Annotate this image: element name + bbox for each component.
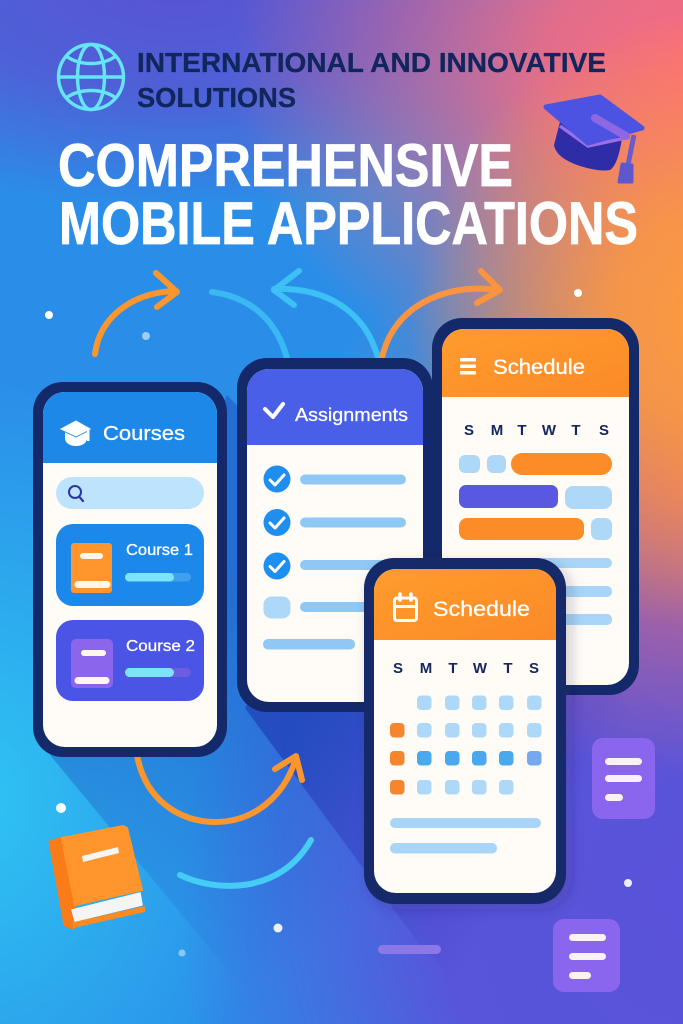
- subtitle heading: SOLUTIONS: [137, 82, 296, 113]
- text lines: [390, 818, 541, 854]
- icon: menu: [460, 358, 476, 374]
- weekday letters: M: [420, 660, 432, 677]
- weekday letters: T: [448, 660, 458, 677]
- icon: document bottom: [553, 919, 620, 992]
- arrow: bottom orange: [137, 755, 302, 822]
- main title: COMPREHENSIVE: [58, 132, 513, 199]
- icon: document top: [592, 738, 655, 819]
- calendar grid: [390, 696, 542, 794]
- phone: schedule bars: [432, 318, 639, 695]
- course card 2: [56, 620, 204, 701]
- weekday letters: [464, 422, 609, 439]
- main title: [58, 132, 638, 257]
- arrow: top orange left: [95, 273, 177, 354]
- assignments label: Assignments: [295, 404, 408, 425]
- course card 2: Course 2: [126, 638, 195, 655]
- courses label: Courses: [103, 423, 185, 445]
- weekday letters: M: [491, 422, 503, 439]
- diagonal shadow of assignments phone: [245, 400, 683, 1024]
- checklist: [263, 466, 406, 650]
- weekday letters: W: [473, 660, 488, 677]
- weekday letters: T: [517, 422, 527, 439]
- schedule label: Schedule: [493, 356, 585, 379]
- decorative pill: [378, 945, 441, 954]
- phone: courses: [33, 382, 227, 757]
- arc: bottom cyan: [180, 840, 311, 886]
- icon: small cap: [59, 420, 92, 446]
- search bar: [56, 477, 204, 509]
- icon: graduation cap: [546, 97, 642, 182]
- phone: assignments: [237, 358, 433, 712]
- arrow: top cyan pointing left: [274, 271, 378, 358]
- icon: calendar: [394, 594, 416, 620]
- subtitle heading: INTERNATIONAL AND INNOVATIVE: [137, 47, 606, 78]
- weekday letters: [393, 660, 539, 677]
- globe icon: [58, 44, 124, 110]
- decorative dots: [45, 289, 632, 956]
- phone: schedule calendar: [364, 558, 566, 904]
- arc: top cyan: [212, 292, 288, 362]
- weekday letters: T: [503, 660, 513, 677]
- weekday letters: S: [393, 660, 403, 677]
- weekday letters: S: [529, 660, 539, 677]
- weekday letters: S: [599, 422, 609, 439]
- schedule blocks: [459, 453, 612, 540]
- arrow: top orange right: [382, 271, 500, 358]
- weekday letters: T: [571, 422, 581, 439]
- text lines: [459, 558, 612, 625]
- course card 1: [56, 524, 204, 606]
- weekday letters: S: [464, 422, 474, 439]
- subtitle heading: [137, 47, 606, 113]
- schedule label: Schedule: [433, 597, 530, 621]
- diagonal shadow of courses phone: [50, 395, 683, 1024]
- icon: orange book: [50, 826, 145, 928]
- course card 1: Course 1: [126, 542, 193, 559]
- weekday letters: W: [542, 422, 557, 439]
- icon: check: [265, 404, 283, 417]
